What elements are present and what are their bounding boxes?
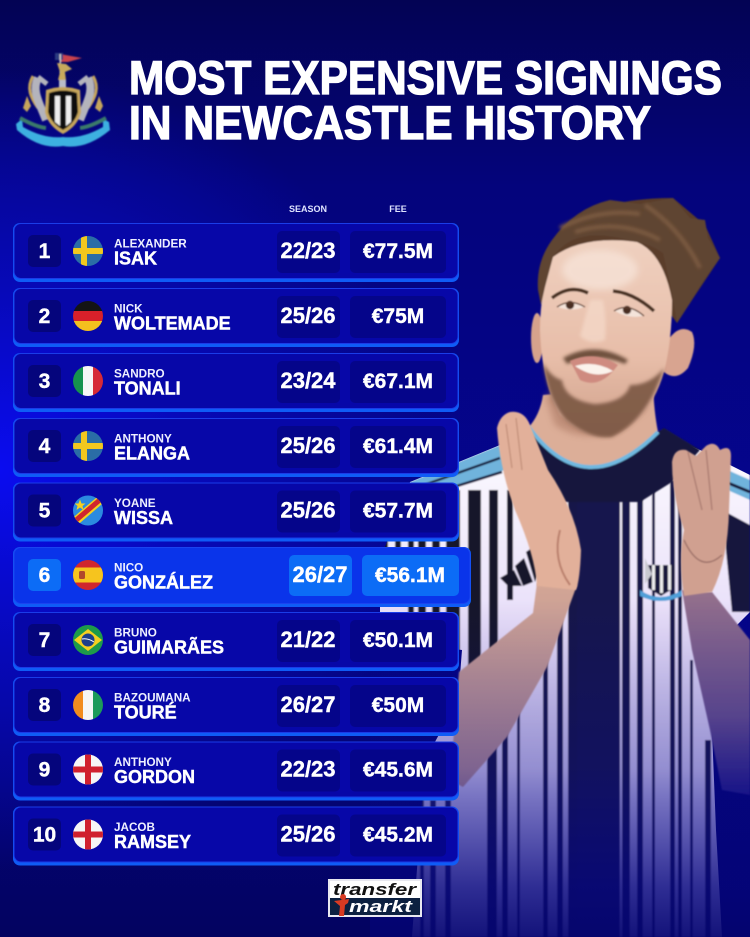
player eyebrows <box>552 289 654 311</box>
player nose <box>580 300 606 342</box>
player face <box>540 240 672 437</box>
row 3: 3 <box>39 370 50 393</box>
player stubble beard <box>543 349 664 437</box>
row 4: 25/26 <box>280 433 336 458</box>
logo: Transfermarkt: transfer <box>333 880 418 899</box>
row 6 highlighted <box>13 547 471 607</box>
row 6 highlighted: 26/27 <box>292 562 348 587</box>
row 5: WISSA <box>114 508 173 528</box>
icon: kit sponsor stripes <box>500 547 540 586</box>
row 9: 9 <box>39 758 50 782</box>
row 1: ISAK <box>114 248 157 268</box>
row 1: 22/23 <box>280 238 336 263</box>
player shirt <box>370 420 750 937</box>
row 2: 25/26 <box>280 303 336 328</box>
row 4: ELANGA <box>114 444 190 464</box>
row 2: 2 <box>39 305 50 328</box>
row 5: €57.7M <box>363 500 433 522</box>
row 7: BRUNO <box>114 626 157 640</box>
flag: Ivory Coast <box>73 690 103 720</box>
row 1: €77.5M <box>363 240 433 263</box>
logo: Transfermarkt <box>328 879 422 917</box>
icon: kit crest <box>640 558 682 601</box>
row 8: €50M <box>372 694 424 717</box>
bottom fade over player <box>370 600 750 937</box>
column header: fee: FEE <box>389 204 407 214</box>
player ears <box>531 313 694 376</box>
row 5: 25/26 <box>280 498 336 522</box>
row 4: ANTHONY <box>114 432 172 446</box>
player mouth <box>570 356 618 383</box>
row 10: €45.2M <box>363 824 433 846</box>
row 9: €45.6M <box>363 758 433 782</box>
row 2: WOLTEMADE <box>114 314 231 334</box>
row 4 <box>13 418 459 477</box>
row 1: 1 <box>39 240 51 263</box>
player hair <box>538 198 720 323</box>
row 2: €75M <box>372 305 424 328</box>
row 3: €67.1M <box>363 370 433 393</box>
row 9 <box>13 742 459 800</box>
row 6 highlighted: 6 <box>39 564 50 587</box>
title <box>129 51 722 149</box>
row 5 <box>13 482 459 542</box>
flag: Germany <box>73 301 103 331</box>
row 7: €50.1M <box>363 629 433 652</box>
flag: DR Congo <box>73 496 103 526</box>
row 4: 4 <box>39 435 51 458</box>
row 8: 8 <box>39 694 51 717</box>
row 8 <box>13 677 459 736</box>
row 7: 21/22 <box>280 627 336 652</box>
row 10: RAMSEY <box>114 832 191 852</box>
row 3: SANDRO <box>114 368 165 380</box>
row 8: 26/27 <box>280 692 336 717</box>
row 7: GUIMARÃES <box>114 636 224 658</box>
row 4: €61.4M <box>363 435 433 458</box>
row 5: YOANE <box>114 497 156 510</box>
row 9: ANTHONY <box>114 756 172 769</box>
row 6 highlighted: €56.1M <box>375 564 445 587</box>
player left arm <box>450 583 577 787</box>
player photo <box>370 198 750 937</box>
icon: Newcastle United crest <box>16 53 110 147</box>
flag: England <box>73 820 103 850</box>
row 5: 5 <box>39 500 51 522</box>
row 10: 25/26 <box>280 822 336 846</box>
logo: Transfermarkt: markt <box>349 897 414 916</box>
row 2: NICK <box>114 302 143 316</box>
row 10: 10 <box>33 824 56 846</box>
row 3 <box>13 353 459 412</box>
flag: Italy <box>73 366 103 396</box>
player neck and collar <box>522 385 700 502</box>
row 1: ALEXANDER <box>114 238 187 250</box>
row 8: BAZOUMANA <box>114 692 191 704</box>
flag: Spain <box>73 560 103 590</box>
player hair backing <box>540 198 720 323</box>
player right arm <box>682 590 750 795</box>
player left hand <box>497 412 581 590</box>
row 9: 22/23 <box>280 756 336 782</box>
flag: England <box>73 754 103 784</box>
title: IN NEWCASTLE HISTORY <box>129 96 651 149</box>
column header: season: SEASON <box>289 204 327 214</box>
flag: Brazil <box>73 625 103 655</box>
row 9: GORDON <box>114 767 195 787</box>
row 7: 7 <box>39 629 50 652</box>
row 2 <box>13 288 459 347</box>
player right hand <box>672 444 731 596</box>
flag: Sweden <box>73 431 103 461</box>
row 6 highlighted: GONZÁLEZ <box>114 572 213 592</box>
row 1 <box>13 223 459 282</box>
row 6 highlighted: NICO <box>114 562 143 574</box>
player forehead highlight <box>562 250 638 290</box>
row 3: TONALI <box>114 378 181 398</box>
player hair highlights <box>560 205 700 268</box>
row 8: TOURÉ <box>114 702 177 722</box>
player head <box>531 198 720 437</box>
row 10: JACOB <box>114 821 155 834</box>
row 10 <box>13 806 459 866</box>
player eyes <box>557 301 644 317</box>
row 3: 23/24 <box>280 368 336 393</box>
row 7 <box>13 612 459 671</box>
flag: Sweden <box>73 236 103 266</box>
